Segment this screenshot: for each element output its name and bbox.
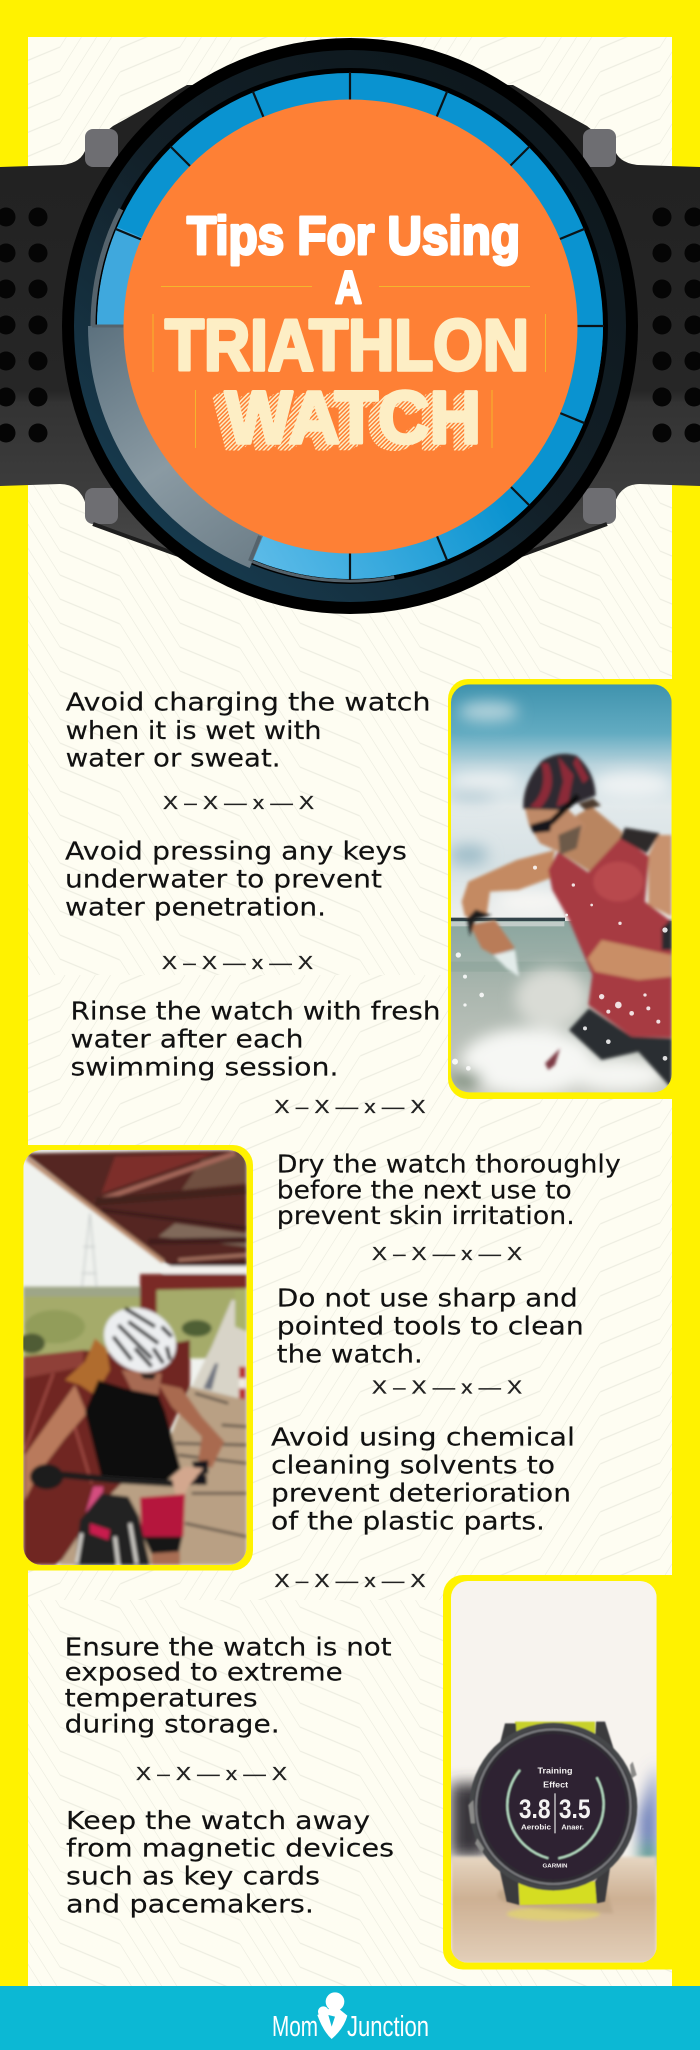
water splash [452,866,668,1071]
tip: dry: Dry the watch thoroughly [277,1150,621,1179]
divider: X – X — x — X [274,1097,426,1117]
tip: rinse [70,996,440,1081]
tip: dry: before the next use to [277,1175,572,1204]
logo icon: mother and child [317,1992,347,2039]
tip: pressing keys: water penetration. [65,892,326,921]
watch illustration [0,38,700,614]
photo: triathlete running out of water [448,684,672,1095]
tip: extreme temperatures: Ensure the watch is not [65,1633,392,1662]
fields [23,1288,247,1358]
watch screen text: GARMIN [542,1863,568,1869]
photo frame: cyclist [0,1145,253,1570]
tip: dry: prevent skin irritation. [277,1201,575,1230]
hand [588,940,672,980]
watch screen text: 3.5 [559,1794,591,1824]
title line: Tips For Using: Tips For Using [187,206,520,266]
tip: sharp tools [277,1284,584,1368]
activity ring [507,1770,604,1858]
watch screen text [519,1765,591,1869]
light blue lower segments [253,326,603,579]
tip: rinse: water after each [70,1024,304,1053]
title line: A: A [335,261,362,313]
watch body [469,1723,637,1891]
MomJunction logo: Mom [272,2011,318,2043]
deck [58,1387,247,1565]
right arm [648,835,672,917]
tip: pressing keys [65,836,407,921]
divider: X – X — x — X [372,1378,522,1398]
MomJunction logo: Junction [347,2011,429,2043]
neck [558,807,622,872]
tip: rinse: Rinse the watch with fresh [70,996,440,1025]
vest [548,837,672,1038]
orange dial face [124,100,578,554]
strap holes [0,208,700,442]
tip: sharp tools: pointed tools to clean [277,1311,584,1340]
roof [25,1150,247,1267]
swim cap [523,754,596,810]
watch lugs [85,129,616,524]
tip: magnetic devices: and pacemakers. [66,1890,314,1919]
handlebar [33,1475,207,1483]
lower case edge [93,524,607,561]
tip: sharp tools: the watch. [277,1339,423,1368]
tip: extreme temperatures [65,1633,392,1739]
watch lugs [495,1722,618,1905]
bike [85,1487,103,1520]
tip: pressing keys: Avoid pressing any keys [65,836,407,865]
shorts [569,1008,672,1088]
inner bezel [74,50,626,602]
shoulder [620,828,660,853]
dial ticks [115,72,604,580]
outer bezel [62,38,638,614]
glass edge lines [92,209,394,581]
dial ring [92,68,608,584]
title line shadow: WATCH: WATCH [217,380,473,463]
divider: X – X — x — X [274,1571,426,1591]
tip: extreme temperatures: exposed to extreme [65,1658,343,1687]
helmet [102,1305,180,1376]
title line: TRIATHLON: TRIATHLON [165,306,529,386]
blue ring [97,73,603,579]
tip: extreme temperatures: during storage. [65,1710,280,1739]
MomJunction logo [272,1992,429,2043]
title line shadow: WATCH: WATCH [220,378,476,462]
divider: X – X — x — X [372,1244,522,1264]
watch buttons [468,1762,637,1853]
arms [25,1385,87,1500]
tip: magnetic devices: such as key cards [66,1861,320,1890]
watch screen text: 3.8 [519,1794,550,1824]
tip: charging: Avoid charging the watch [66,688,431,717]
watch screen text: Training [537,1765,572,1775]
goggles [531,796,578,828]
arm [462,850,555,917]
title line: WATCH: WATCH [225,376,481,459]
face [122,1370,162,1395]
divider: X – X — x — X [163,793,314,813]
tip: chemical solvents: Avoid using chemical [271,1423,575,1452]
tip: extreme temperatures: temperatures [65,1684,258,1713]
footer bar [0,1986,700,2050]
tip: charging: when it is wet with [66,716,322,745]
photo: cyclist checking watch [18,1150,247,1565]
tip: rinse: swimming session. [70,1052,338,1081]
tip: pressing keys: underwater to prevent [65,864,382,893]
watch strap and case [0,85,700,560]
face [525,807,585,852]
tip: chemical solvents: cleaning solvents to [271,1451,555,1480]
tip: sharp tools: Do not use sharp and [277,1284,578,1313]
light blue left segment [97,227,350,326]
shorts [140,1494,185,1538]
title rule lines [153,286,546,448]
divider: X – X — x — X [136,1764,287,1784]
tip: charging [66,688,431,773]
frame [140,1274,247,1313]
tip: chemical solvents: of the plastic parts. [271,1506,545,1535]
top [85,1380,181,1485]
divider: X – X — x — X [162,953,313,973]
tip: dry [277,1150,621,1230]
title [153,206,546,465]
watch screen text: Aerobic [521,1822,551,1831]
railing and wall [23,1340,190,1565]
photo: Garmin watch on table [451,1581,658,1963]
tip: charging: water or sweat. [66,744,281,773]
watch screen text: Effect [543,1780,569,1789]
tip: chemical solvents: prevent deterioration [271,1479,571,1508]
road [188,1300,247,1407]
photo frame: watch close-up [443,1575,700,1970]
watch screen text: Anaer. [561,1822,584,1831]
watch strap [515,1722,595,1737]
tip: magnetic devices: from magnetic devices [66,1834,394,1863]
tip: chemical solvents [271,1423,575,1535]
hair [65,1338,110,1395]
photo frame: swimmer [448,679,700,1099]
title line shadow: WATCH: WATCH [214,382,470,465]
pylon [82,1213,97,1290]
tip: magnetic devices [66,1806,394,1919]
tip: magnetic devices: Keep the watch away [66,1806,370,1835]
glass reflection [88,326,350,568]
